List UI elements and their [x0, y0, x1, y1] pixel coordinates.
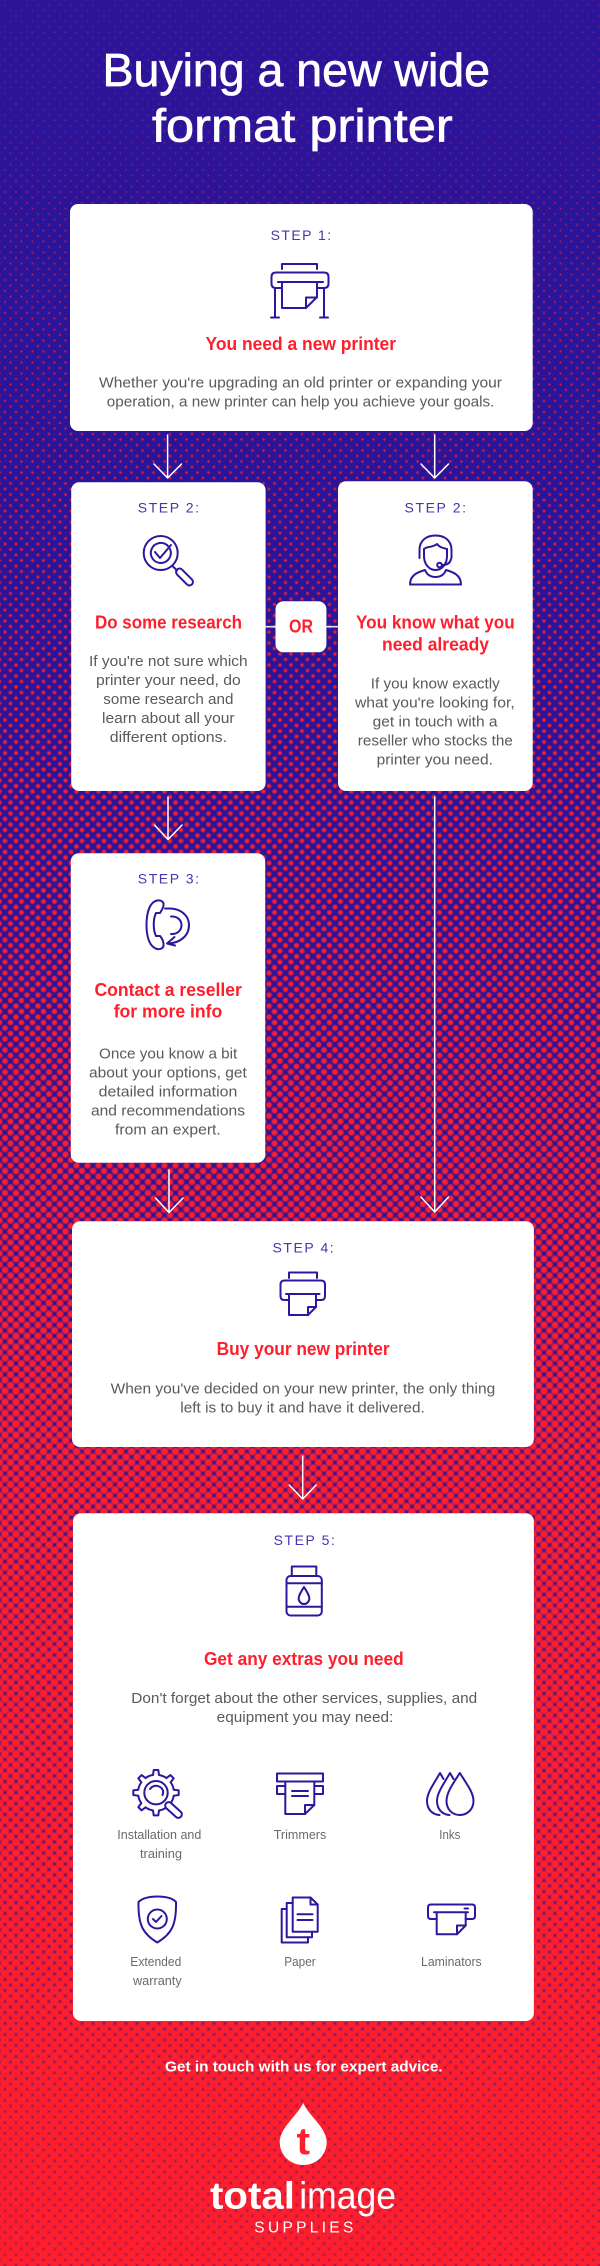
arrow: step 1 to step 2 left: [154, 435, 182, 478]
body text: [99, 375, 502, 411]
body text: left is to buy it and have it delivered.: [180, 1400, 425, 1416]
extra: laminators: [421, 1904, 482, 1969]
logo drop letter: t: [296, 2121, 310, 2163]
body text: detailed information: [99, 1084, 237, 1100]
panel: step 4: [72, 1221, 534, 1447]
icon: agent with headset: [410, 536, 461, 584]
label: Inks: [439, 1827, 461, 1842]
heading: Contact a reseller: [94, 980, 242, 1000]
logo drop: [280, 2103, 327, 2165]
icon: trimmer: [277, 1774, 323, 1814]
step label: STEP 2:: [138, 499, 199, 515]
body text: [354, 676, 515, 768]
panel: step 3: [71, 853, 265, 1163]
logo supplies: SUPPLIES: [254, 2220, 353, 2237]
body text: different options.: [110, 730, 227, 746]
body text: about your options, get: [89, 1065, 247, 1081]
body text: from an expert.: [115, 1122, 221, 1138]
step label: STEP 4:: [272, 1239, 334, 1255]
badge: or: [276, 601, 326, 652]
body text: [89, 654, 248, 746]
body text: Don't forget about the other services, supplies, and: [131, 1691, 477, 1707]
heading: You need a new printer: [206, 334, 396, 354]
arrow: step 3 to step 4: [156, 1170, 183, 1212]
heading: for more info: [114, 1001, 222, 1021]
icon: printer: [280, 1272, 325, 1315]
arrow: step 1 to step 2 right: [421, 435, 448, 478]
heading: Do some research: [95, 613, 242, 633]
label: [130, 1954, 182, 1988]
icon: paper stack: [282, 1898, 318, 1942]
heading: Get any extras you need: [204, 1649, 404, 1669]
body text: [131, 1691, 477, 1726]
body text: If you know exactly: [371, 676, 501, 692]
body text: [111, 1381, 495, 1416]
icon: magnifier with check: [144, 536, 194, 587]
extra: extended warranty: [130, 1896, 182, 1988]
body text: get in touch with a: [373, 714, 498, 730]
title: Buying a new wide: [102, 44, 490, 96]
connector: or right: [326, 626, 338, 628]
body text: learn about all your: [102, 711, 235, 727]
icon: wide format printer: [271, 264, 328, 318]
body text: what you're looking for,: [354, 695, 515, 711]
panel: step 5: [73, 1513, 534, 2021]
arrow: step 2 to step 4: [421, 797, 448, 1212]
badge: or: OR: [289, 616, 313, 636]
icon: phone callback: [146, 900, 189, 949]
extra: inks: [427, 1773, 474, 1842]
title: format printer: [152, 100, 453, 152]
step label: STEP 5:: [274, 1532, 335, 1548]
label: Installation and: [117, 1827, 201, 1842]
icon: ink bottle: [286, 1566, 322, 1616]
arrow: step 4 to step 5: [289, 1456, 316, 1499]
arrow: step 2 to step 3: [154, 797, 182, 840]
icon: ink drops: [427, 1773, 474, 1815]
label: Paper: [284, 1954, 316, 1969]
body text: Once you know a bit: [99, 1046, 237, 1062]
panel: step 1: [70, 204, 533, 431]
body text: reseller who stocks the: [358, 733, 513, 749]
label: training: [140, 1846, 182, 1861]
body text: printer your need, do: [96, 673, 241, 689]
body text: printer you need.: [377, 752, 493, 768]
extra: paper: [282, 1898, 318, 1969]
panel: step 2 research: [71, 482, 266, 791]
label: Laminators: [421, 1954, 482, 1969]
logo: [210, 2103, 396, 2237]
extra: installation and training: [117, 1770, 201, 1861]
body text: equipment you may need:: [217, 1710, 393, 1726]
heading: Buy your new printer: [217, 1339, 390, 1359]
body text: some research and: [103, 692, 233, 708]
body text: and recommendations: [91, 1103, 245, 1119]
body text: [89, 1046, 247, 1138]
body text: If you're not sure which: [89, 654, 248, 670]
label: warranty: [132, 1973, 182, 1988]
body text: Whether you're upgrading an old printer or expanding your: [99, 375, 502, 391]
body text: When you've decided on your new printer, the only thing: [111, 1381, 495, 1397]
connector: or left: [266, 626, 276, 628]
heading: You know what you: [356, 613, 515, 633]
icon: gear with magnifier: [133, 1770, 183, 1819]
step label: STEP 2:: [404, 499, 466, 515]
heading: need already: [382, 634, 489, 654]
extra: trimmers: [274, 1774, 327, 1842]
label: Trimmers: [274, 1827, 327, 1842]
logo wordmark light: image: [299, 2175, 396, 2217]
panel: step 2 know what you need: [338, 481, 533, 791]
logo wordmark bold: total: [210, 2175, 295, 2217]
step label: STEP 3:: [138, 870, 199, 886]
call to action: Get in touch with us for expert advice.: [165, 2059, 443, 2076]
step label: STEP 1:: [271, 227, 331, 243]
body text: operation, a new printer can help you achieve your goals.: [107, 395, 494, 411]
label: Extended: [130, 1954, 181, 1969]
title: [102, 44, 490, 152]
heading: [94, 980, 242, 1021]
icon: shield: [138, 1896, 176, 1942]
label: [117, 1827, 201, 1861]
icon: laminator: [428, 1904, 475, 1934]
heading: [356, 613, 515, 654]
